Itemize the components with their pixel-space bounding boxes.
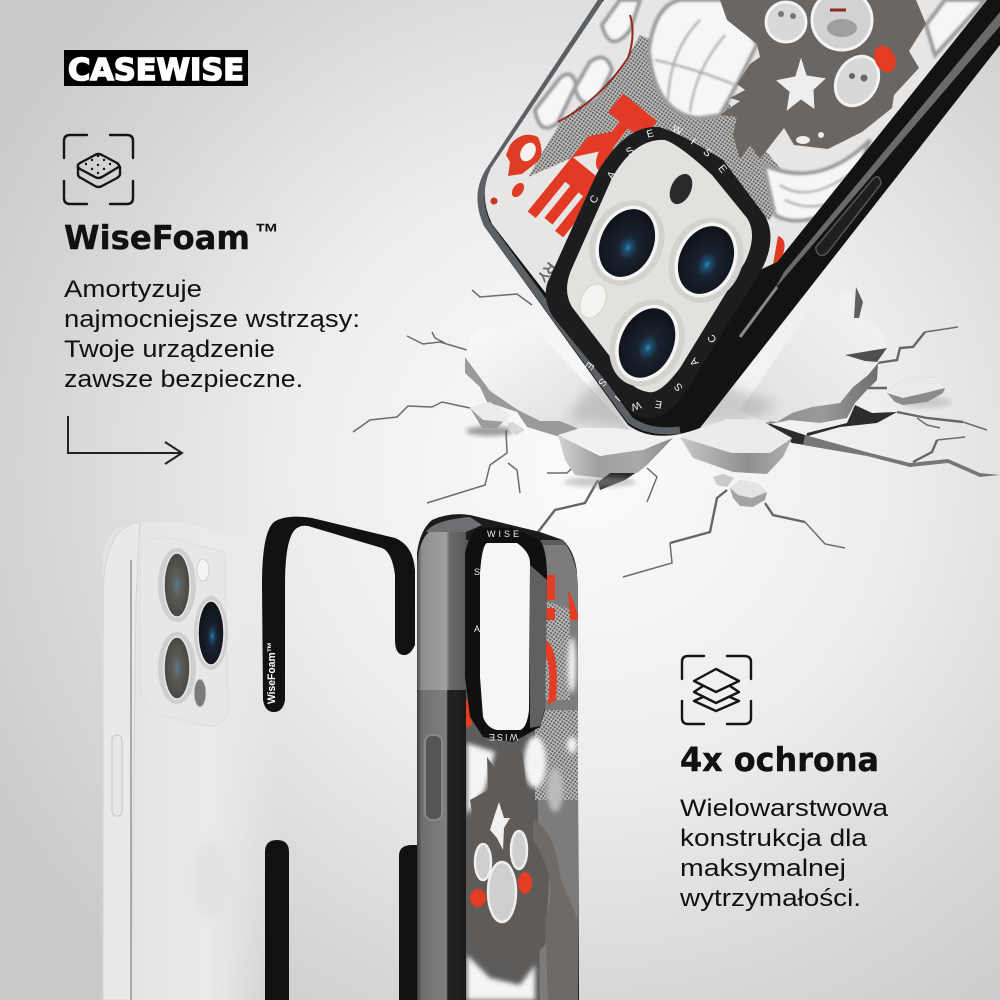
icon: layers in focus frame <box>682 656 751 724</box>
text block: 4x ochrona description: wytrzymałości. <box>679 885 861 912</box>
foam frame: lower right strip <box>399 845 418 1000</box>
arrow <box>68 416 182 464</box>
ring lettering: E <box>583 359 596 372</box>
ring lettering: W <box>629 398 643 413</box>
metallic side <box>417 528 466 690</box>
lettering: RE <box>519 84 667 246</box>
ring lettering: WISE <box>487 732 518 742</box>
slab: left <box>465 357 580 437</box>
ring lettering: E <box>645 127 655 141</box>
contact shadow <box>565 375 780 428</box>
text block: WiseFoam description: zawsze bezpieczne. <box>64 366 303 393</box>
text block: WiseFoam description: Amortyzuje <box>64 276 202 303</box>
ring lettering: S <box>672 380 686 393</box>
printed artwork <box>484 0 987 294</box>
foam label: WiseFoam™ <box>266 642 278 704</box>
phone: case side view <box>417 514 579 1000</box>
phone: white titanium back <box>103 522 278 1000</box>
camera plateau <box>567 140 752 392</box>
logo: CASEWISE: CASEWISE <box>68 53 244 88</box>
ring lettering: A <box>688 355 701 368</box>
text block: 4x ochrona description: maksymalnej <box>680 855 846 882</box>
heading trademark: ™ <box>255 219 279 247</box>
text block: 4x ochrona description <box>679 795 889 912</box>
camera ring <box>546 127 770 418</box>
faint logo <box>192 840 228 920</box>
translucent rim <box>481 0 680 431</box>
foam frame: lower left strip <box>265 840 289 1000</box>
ring lettering: I <box>612 393 622 403</box>
lenses <box>576 188 757 399</box>
side button <box>425 735 442 820</box>
creature <box>470 750 549 950</box>
slab: centre right <box>680 437 792 474</box>
ring lettering: A <box>474 624 480 634</box>
balloon inner shading <box>655 20 855 206</box>
creature eyes <box>475 831 527 922</box>
ring lettering: I <box>688 136 698 147</box>
rear lenses <box>158 548 228 704</box>
dark fissure right <box>765 405 897 445</box>
ring lettering: W <box>670 123 684 138</box>
white balloon shapes <box>535 0 985 221</box>
rock: bottom small <box>713 474 734 487</box>
heading: WiseFoam: WiseFoam <box>64 218 250 257</box>
crater: shadow, cracks and broken slabs <box>353 287 1000 577</box>
creature face <box>766 0 900 114</box>
text block: 4x ochrona description: konstrukcja dla <box>680 825 868 852</box>
heading: 4x ochrona: 4x ochrona <box>680 740 879 779</box>
rock: right <box>887 377 945 405</box>
ring lettering: C <box>705 332 719 345</box>
side highlight <box>774 12 1000 290</box>
text block: 4x ochrona description: Wielowarstwowa <box>680 795 889 822</box>
camera ring <box>465 527 547 742</box>
halftone <box>528 35 790 220</box>
ring lettering: E <box>715 163 729 176</box>
cracks <box>353 290 987 577</box>
red outline lettering <box>558 15 633 122</box>
rock: small left <box>507 422 525 435</box>
side frame <box>103 522 140 1000</box>
text block: WiseFoam description: najmocniejsze wstrząsy: <box>64 306 360 333</box>
red splats <box>506 135 542 176</box>
camera opening <box>480 543 530 730</box>
slab: right <box>765 363 878 425</box>
creature star <box>490 802 510 850</box>
text block: WiseFoam description <box>64 276 360 393</box>
creature cheeks <box>470 872 532 907</box>
creature <box>720 0 926 159</box>
ring lettering: A <box>605 169 618 182</box>
case body <box>478 0 1000 436</box>
ring lettering: S <box>595 375 609 388</box>
ring lettering: E <box>654 397 663 410</box>
ring lettering: S <box>624 145 637 158</box>
text block: WiseFoam description: Twoje urządzenie <box>64 336 275 363</box>
creature right arm <box>533 820 578 1000</box>
side button <box>112 735 122 816</box>
flash and microphone <box>194 559 209 707</box>
rock: bottom large <box>730 480 767 507</box>
foam frame: top black strip <box>262 517 415 712</box>
ring lettering <box>474 529 522 742</box>
ring lettering: C <box>587 193 602 206</box>
flash and sensor <box>575 170 697 322</box>
ring lettering: S <box>700 146 714 160</box>
icon: foam pad in focus frame <box>64 135 133 204</box>
spike and dark triangle on right slab <box>845 287 887 362</box>
top chamfer <box>426 517 482 532</box>
side button <box>816 177 881 256</box>
printed artwork <box>466 540 578 1000</box>
camera bump <box>140 538 228 726</box>
red marks <box>466 575 578 728</box>
creature dots <box>796 132 824 144</box>
ring lettering: WISE <box>487 529 522 539</box>
creature star <box>775 56 827 112</box>
white blurred shapes <box>467 637 577 1000</box>
rocks <box>470 402 510 428</box>
slab: centre left <box>558 435 673 478</box>
ring highlight <box>530 565 547 728</box>
phone: tilted case hitting the wall <box>470 0 1000 436</box>
ring lettering: S <box>474 567 480 577</box>
printed artwork: RY <box>533 258 559 285</box>
shadow under centre slab <box>598 470 640 490</box>
grey wedge right <box>803 435 1000 477</box>
ring lettering <box>583 123 729 413</box>
